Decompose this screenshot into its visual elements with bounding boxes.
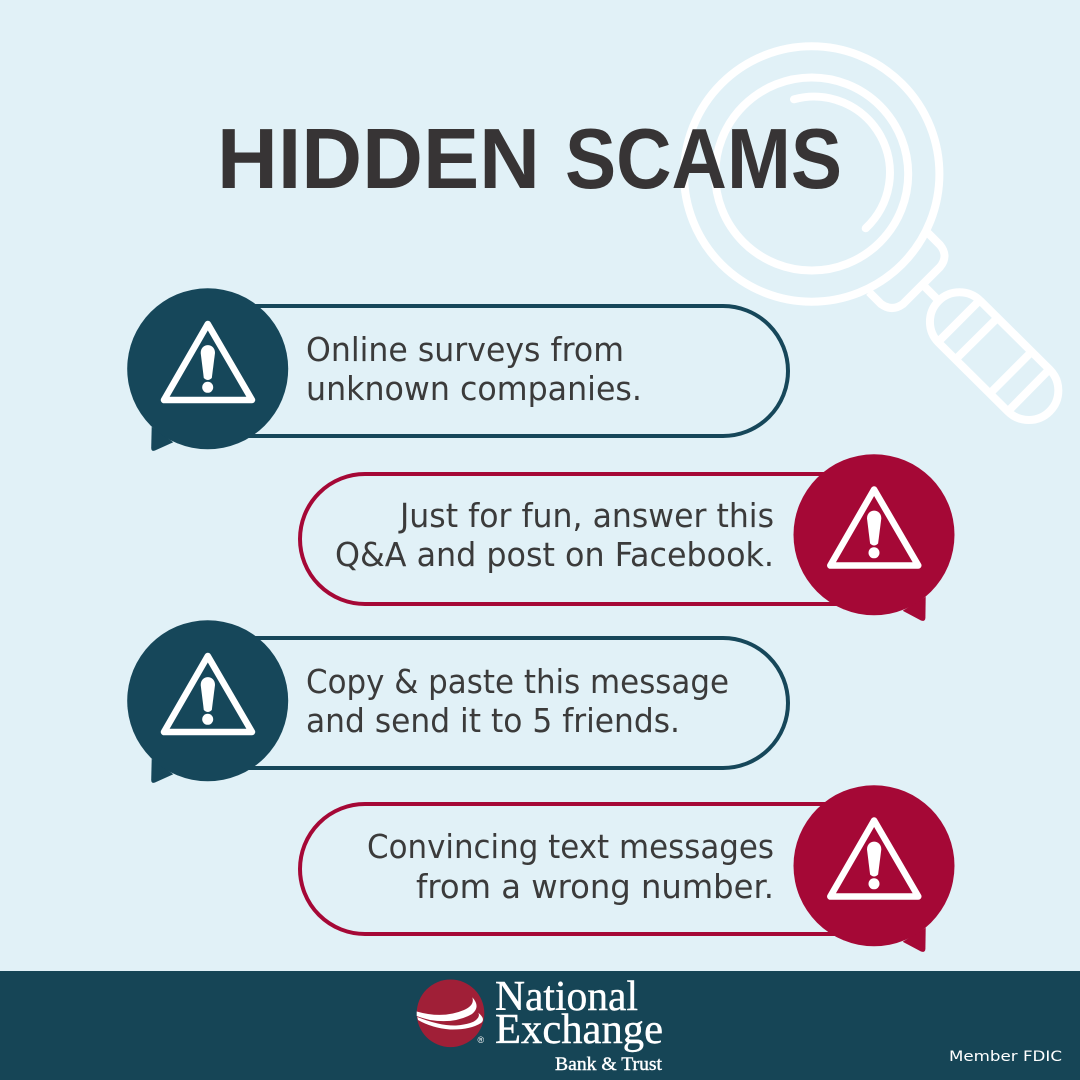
warning bubble [127,288,288,451]
brand subline: Bank & Trust [555,1055,663,1075]
title: HIDDEN [217,112,540,207]
title: SCAMS [565,112,842,207]
text: from a wrong number. [416,868,774,906]
text: Just for fun, answer this [398,497,774,535]
text: Online surveys from [306,331,624,369]
brand name: National [495,974,638,1020]
brand name: Exchange [495,1007,663,1053]
text: Q&A and post on Facebook. [335,536,774,574]
pill outline [300,804,880,934]
pill outline [200,306,788,436]
pill outline [300,474,880,604]
text: Copy & paste this message [306,663,729,701]
footer [0,971,1080,1080]
icon: globe: ® [478,1035,484,1045]
warning bubble [794,785,954,952]
text: Convincing text messages [367,828,774,866]
icon: globe [417,980,484,1047]
panel: copy and paste [127,620,788,783]
logo [417,974,663,1075]
warning bubble [794,454,954,621]
warning bubble [127,620,288,783]
pill outline [200,638,788,768]
panel: convincing texts [300,785,954,952]
panel: just for fun [300,454,954,621]
text: unknown companies. [306,370,642,408]
text: and send it to 5 friends. [306,702,680,740]
icon: magnifying glass [684,46,1058,420]
panel: online surveys [127,288,788,451]
member fdic: Member FDIC [949,1049,1062,1065]
